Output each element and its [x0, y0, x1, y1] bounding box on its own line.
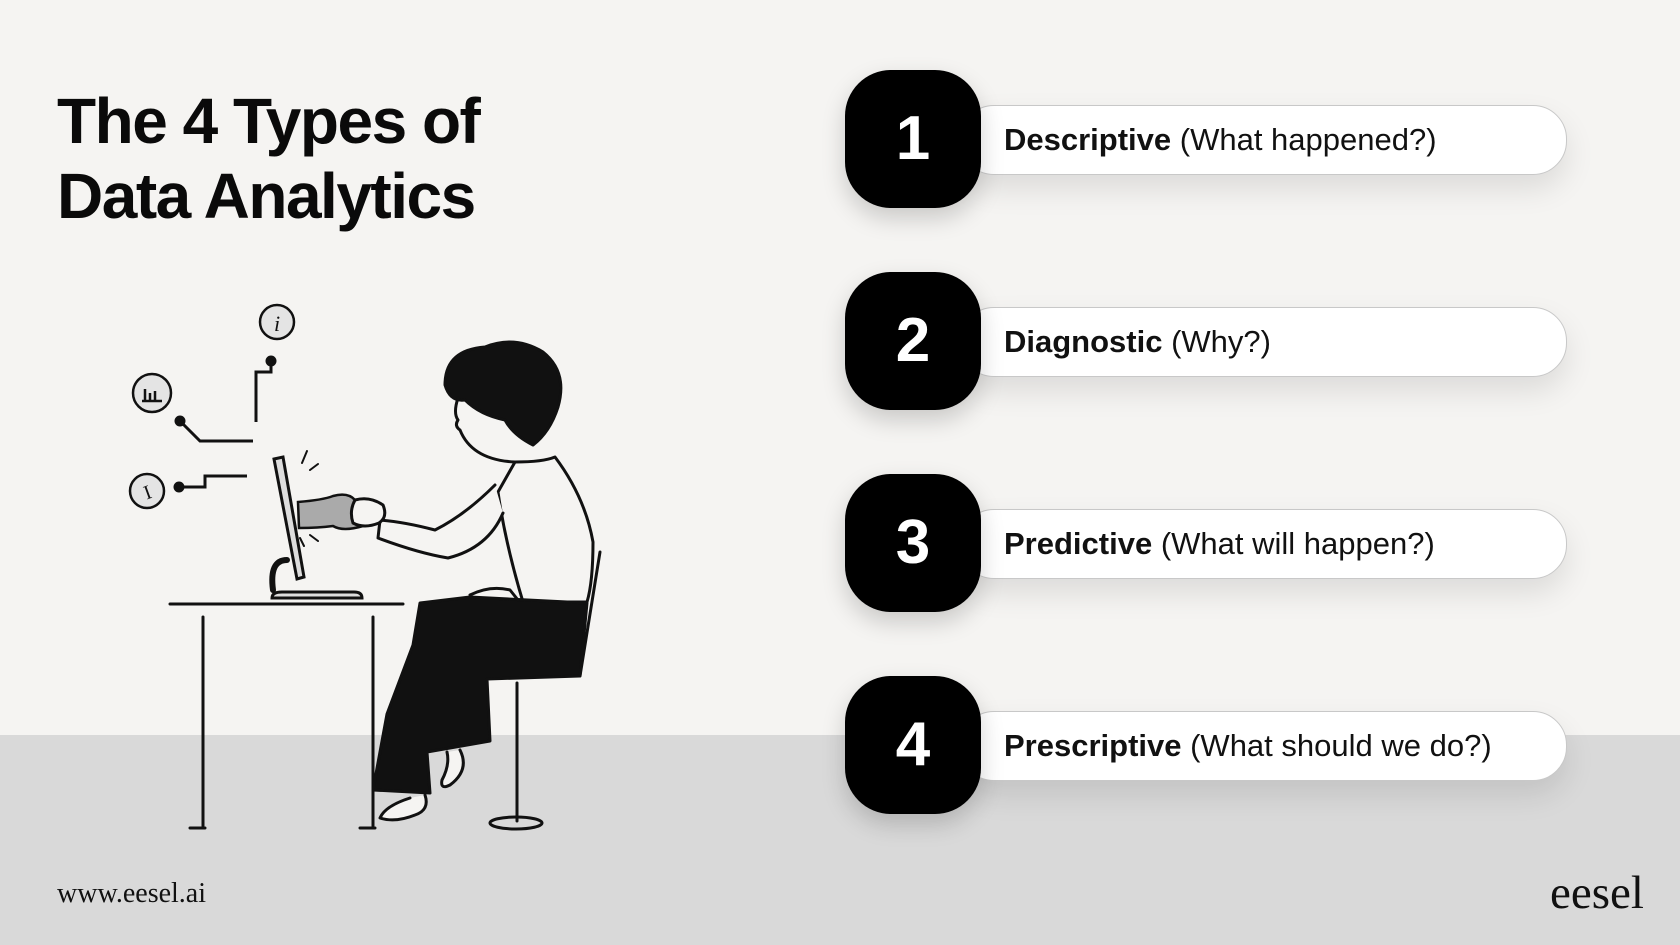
illustration: person at computer [128, 304, 602, 830]
badge 1 [845, 70, 981, 208]
row 1: Descriptive [835, 70, 1570, 228]
pill 2: Diagnostic (Why?) [1004, 324, 1271, 359]
icon: info circle [260, 305, 294, 339]
connector lines [175, 357, 275, 491]
title: Data Analytics [57, 160, 475, 232]
monitor and desk [170, 451, 403, 828]
icon: chart circle [133, 374, 171, 412]
row 4: Prescriptive [836, 676, 1568, 834]
badge 2 [845, 272, 981, 410]
badge 2: 2 [896, 306, 930, 375]
feet [380, 795, 426, 820]
row 2: Diagnostic [835, 272, 1570, 430]
badge 3 [845, 474, 981, 612]
icon: info circle: i [274, 311, 280, 336]
pill 1: Descriptive (What happened?) [1004, 122, 1437, 157]
face [456, 398, 515, 462]
row 3: Predictive [835, 474, 1570, 632]
title [57, 85, 481, 232]
pill 2 [960, 307, 1567, 377]
hair [445, 342, 561, 445]
badge 3: 3 [896, 508, 930, 577]
badge 4: 4 [896, 710, 930, 779]
badge 1: 1 [896, 104, 930, 173]
badge 4 [845, 676, 981, 814]
title: The 4 Types of [57, 85, 479, 157]
person [351, 342, 600, 829]
icon: text circle [130, 474, 164, 508]
footer url: www.eesel.ai [57, 878, 206, 909]
gray hand from screen [298, 495, 369, 529]
icon: text circle: I [141, 481, 155, 504]
knee hand [470, 588, 518, 600]
pill 3 [960, 509, 1567, 579]
pill 4 [960, 711, 1567, 781]
pants [373, 597, 587, 793]
pill 1 [960, 105, 1567, 175]
arm [378, 485, 503, 558]
footer logo: eesel [1550, 867, 1644, 919]
pill 3: Predictive (What will happen?) [1004, 526, 1435, 561]
chair [480, 552, 600, 821]
torso [498, 457, 593, 602]
pill 4: Prescriptive (What should we do?) [1004, 728, 1492, 763]
hand [351, 499, 385, 526]
